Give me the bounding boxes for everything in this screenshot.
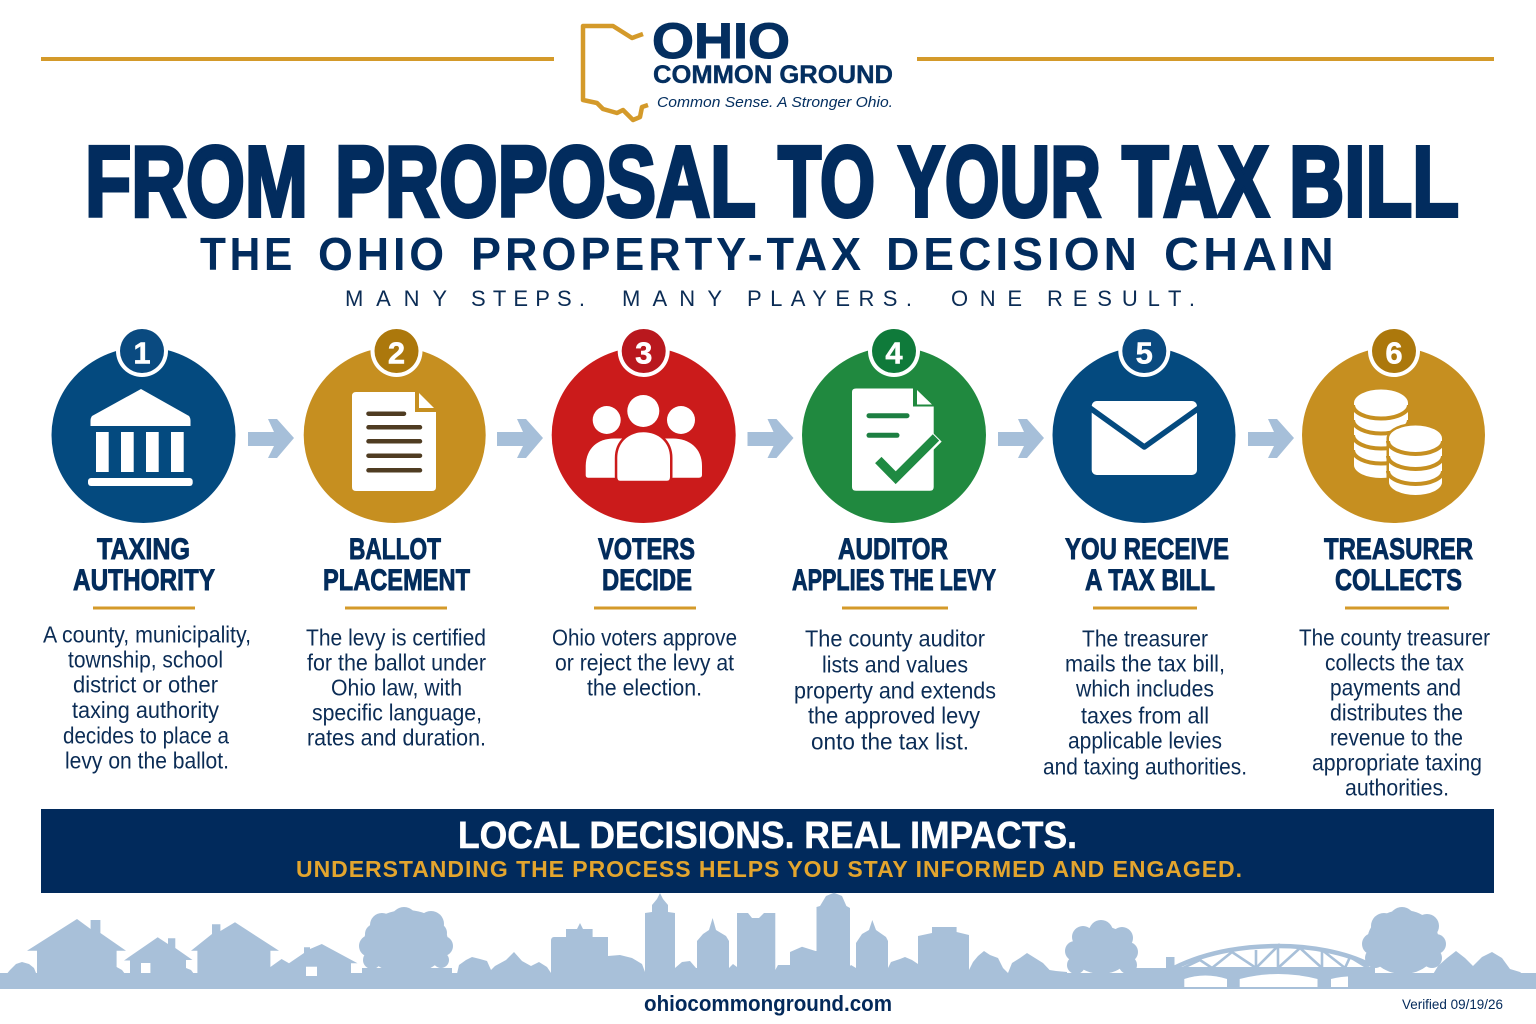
arrow 2 to 3 <box>497 419 543 458</box>
skyline silhouette <box>0 893 1536 989</box>
tagline: RESULT. <box>1047 286 1195 311</box>
description: district or other <box>73 672 218 698</box>
step 2: ballot placement <box>304 325 486 750</box>
description: The treasurer <box>1082 626 1208 652</box>
left bush <box>0 962 38 989</box>
icon: envelope <box>1052 325 1236 523</box>
heading: APPLIES THE LEVY <box>792 564 996 597</box>
icon: Ohio state outline <box>583 26 648 120</box>
heading <box>1324 533 1473 597</box>
tagline: MANY <box>345 286 447 311</box>
heading: A TAX BILL <box>1085 564 1215 597</box>
subtitle: OHIO <box>318 228 448 280</box>
heading: YOU RECEIVE <box>1065 533 1229 566</box>
heading <box>598 533 695 597</box>
description: The levy is certified <box>306 624 486 650</box>
tree left <box>359 907 453 974</box>
tagline: PLAYERS. <box>747 286 912 311</box>
tagline: ONE <box>951 286 1022 311</box>
tree centre right <box>1065 920 1138 974</box>
icon: document <box>304 325 486 523</box>
heading: DECIDE <box>602 564 692 597</box>
description: and taxing authorities. <box>1043 754 1247 780</box>
description: collects the tax <box>1325 650 1464 676</box>
description: onto the tax list. <box>811 728 969 754</box>
description: levy on the ballot. <box>65 748 229 774</box>
step 1: taxing authority <box>43 325 251 774</box>
description: the election. <box>587 674 702 700</box>
arrow 5 to 6 <box>1248 419 1294 458</box>
description: taxing authority <box>72 697 219 723</box>
description: specific language, <box>312 700 482 726</box>
description: distributes the <box>1330 700 1463 726</box>
description <box>794 626 996 754</box>
arrow 1 to 2 <box>248 419 294 458</box>
heading: COLLECTS <box>1335 564 1462 597</box>
title: BILL <box>1289 126 1459 238</box>
heading: PLACEMENT <box>323 564 470 597</box>
icon: coin stacks <box>1302 325 1485 523</box>
arrow 3 to 4 <box>748 419 794 458</box>
subtitle: CHAIN <box>1164 228 1338 280</box>
description: lists and values <box>822 652 968 678</box>
description <box>43 622 251 774</box>
step 3: voters decide <box>552 325 737 700</box>
description: payments and <box>1330 674 1461 700</box>
description: township, school <box>68 646 223 672</box>
description: Ohio law, with <box>331 674 462 700</box>
banner <box>41 809 1494 893</box>
title: TAX <box>1122 126 1269 238</box>
icon: group of people <box>552 325 736 523</box>
description: property and extends <box>794 678 996 704</box>
icon: envelope: 5 <box>1136 336 1153 370</box>
heading: VOTERS <box>598 533 695 566</box>
heading: AUDITOR <box>838 533 948 566</box>
description: rates and duration. <box>307 724 486 750</box>
heading <box>73 533 215 597</box>
heading: TREASURER <box>1324 533 1473 566</box>
logo wordmark: OHIO <box>652 13 790 69</box>
heading: TAXING <box>97 533 190 566</box>
description: The county treasurer <box>1299 624 1490 650</box>
website footer: ohiocommonground.com <box>644 991 892 1016</box>
subtitle <box>200 228 1338 280</box>
description: for the ballot under <box>307 650 486 676</box>
icon: document with checkmark: 4 <box>885 336 903 370</box>
icon: document with checkmark <box>802 325 986 523</box>
icon: document: 2 <box>388 336 405 370</box>
banner headline: LOCAL DECISIONS. REAL IMPACTS. <box>458 815 1077 857</box>
heading: AUTHORITY <box>73 564 215 597</box>
tagline: STEPS. <box>471 286 585 311</box>
description <box>306 624 486 750</box>
tagline <box>345 286 1195 311</box>
description <box>1043 626 1247 780</box>
description: or reject the levy at <box>555 650 734 676</box>
icon: government building <box>52 325 236 523</box>
description: appropriate taxing <box>1312 750 1482 776</box>
houses <box>27 919 358 978</box>
description: decides to place a <box>63 722 230 748</box>
subtitle: THE <box>200 228 296 280</box>
icon: government building: 1 <box>133 336 151 370</box>
right bushes <box>1432 951 1536 989</box>
description: revenue to the <box>1330 724 1463 750</box>
description <box>1299 624 1490 800</box>
arrow 4 to 5 <box>998 419 1044 458</box>
title: PROPOSAL <box>335 126 756 238</box>
title <box>85 126 1459 238</box>
logo: Ohio Common Ground <box>583 13 893 120</box>
description: which includes <box>1075 676 1214 702</box>
title: YOUR <box>898 126 1101 238</box>
title: TO <box>778 126 875 238</box>
heading <box>323 533 470 597</box>
bridge <box>1166 946 1375 987</box>
tagline: MANY <box>622 286 722 311</box>
step 5: you receive a tax bill <box>1043 325 1247 780</box>
description: the approved levy <box>808 702 980 728</box>
step 6: treasurer collects <box>1299 325 1490 800</box>
subtitle: PROPERTY-TAX <box>471 228 865 280</box>
verification date: Verified 09/19/26 <box>1402 997 1503 1012</box>
heading <box>1065 533 1229 597</box>
logo second line: COMMON GROUND <box>653 61 893 89</box>
bushes and buildings left of centre <box>456 893 1067 980</box>
description: applicable levies <box>1068 728 1222 754</box>
description: Ohio voters approve <box>552 624 737 650</box>
description <box>552 624 737 700</box>
description: A county, municipality, <box>43 622 251 648</box>
description: mails the tax bill, <box>1065 650 1225 676</box>
logo tagline: Common Sense. A Stronger Ohio. <box>657 94 893 111</box>
description: authorities. <box>1345 774 1449 800</box>
description: taxes from all <box>1081 702 1209 728</box>
title: FROM <box>85 126 308 238</box>
tree right <box>1362 907 1446 974</box>
banner subline: UNDERSTANDING THE PROCESS HELPS YOU STAY INFORMED AND ENGAGED. <box>296 856 1242 882</box>
heading: BALLOT <box>349 533 441 566</box>
description: The county auditor <box>805 626 985 652</box>
heading <box>792 533 996 597</box>
step 4: auditor applies the levy <box>792 325 996 754</box>
icon: coin stacks: 6 <box>1385 336 1403 370</box>
icon: group of people: 3 <box>635 336 652 370</box>
subtitle: DECISION <box>886 228 1141 280</box>
